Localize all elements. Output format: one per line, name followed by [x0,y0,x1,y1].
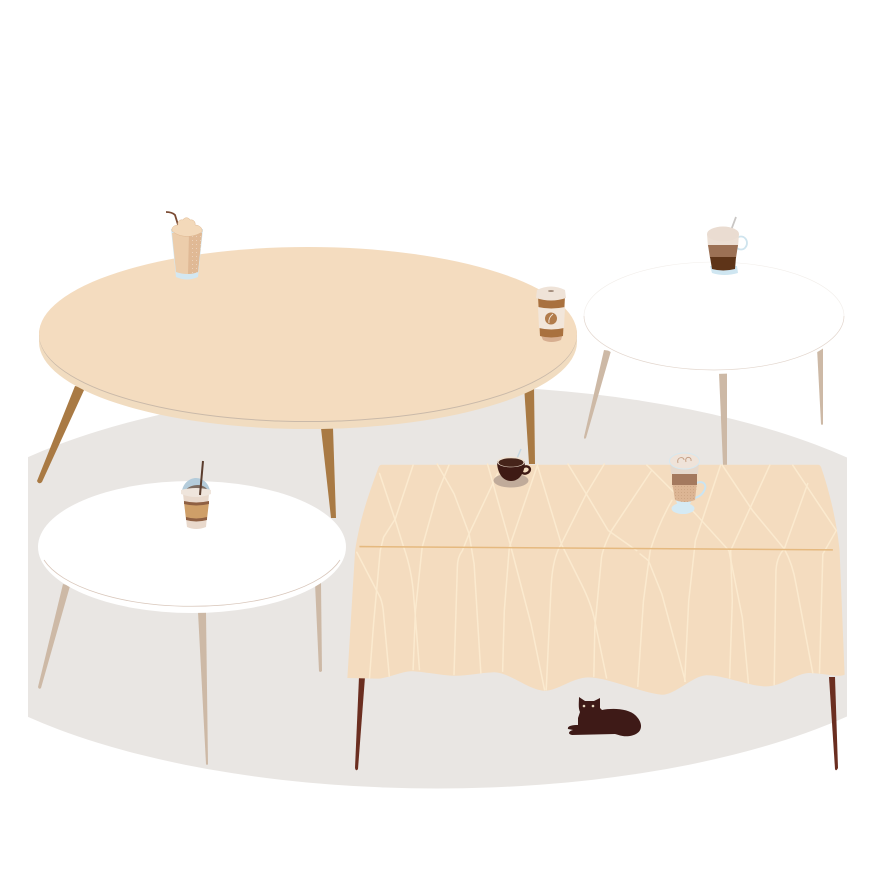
mid layer [708,245,738,258]
lid hole [548,290,554,292]
cup [497,461,525,481]
cup body [183,494,209,529]
latte speckle [672,484,697,502]
cloth fold line [359,547,833,550]
cup white band [538,307,565,330]
right table legs [584,348,823,465]
big table legs [37,385,535,518]
stem [675,498,693,506]
straw [166,212,179,228]
spoon [730,217,736,233]
drink: espresso cup on saucer [494,449,531,488]
large round wooden table [37,247,577,518]
coffee shade [188,233,202,274]
sleeve band top [184,501,209,506]
cup rim [497,457,525,467]
big table top [39,247,577,421]
glass [171,229,203,280]
handle [695,482,705,498]
cup sleeve bottom [540,333,563,342]
foam top [670,453,700,469]
drink: latte glass with handle [670,453,705,514]
left table legs [38,583,322,765]
coffee in dome [185,485,208,491]
spoon [515,449,521,463]
cat eyes [583,705,594,707]
big table shadow line [39,248,577,422]
cloth crease lines [357,464,836,690]
tablecloth legs [355,677,838,770]
lid [536,286,566,300]
handle [520,465,531,475]
cloth shape [347,465,845,695]
coffee speckle [190,233,202,274]
left table edge line [44,560,340,606]
handle [735,236,747,250]
tablecloth pattern group [347,464,845,695]
coffee surface [498,458,524,467]
right table edge line [584,316,844,370]
drink: layered coffee in glass mug [707,217,747,275]
big table rim [39,255,577,429]
cup brown body [538,296,565,338]
round white table, lower left [38,481,346,765]
foam [707,226,739,242]
dome lid [182,478,210,491]
right table far edge [584,262,844,316]
whipped cream [172,218,202,236]
rim [181,488,211,497]
coffee [172,233,202,274]
floor ellipse [0,386,888,788]
cat body [568,697,641,736]
drink: iced takeaway cup with straw [181,461,211,529]
foot [672,503,694,514]
latte layer [672,482,697,502]
straw [200,461,203,495]
white layer [707,234,739,247]
sleeve band bottom [186,517,207,522]
glass base [710,266,738,275]
bean logo [545,312,557,324]
dark layer [710,257,736,270]
right table top [584,262,844,374]
round white table, right [584,262,844,465]
illustration: cafe tables with coffee drinks and a cat [28,211,847,788]
sleeve [184,502,209,521]
black cat [568,697,641,736]
left table top [38,481,346,613]
rectangular table with tablecloth [347,464,845,770]
bean slit [549,314,553,323]
white layer [670,461,699,474]
drink: takeaway cup with coffee bean logo [536,286,566,342]
saucer [494,474,528,488]
brown layer [672,472,697,485]
latte art [678,457,691,463]
drink: iced frappe in glass [166,212,203,280]
